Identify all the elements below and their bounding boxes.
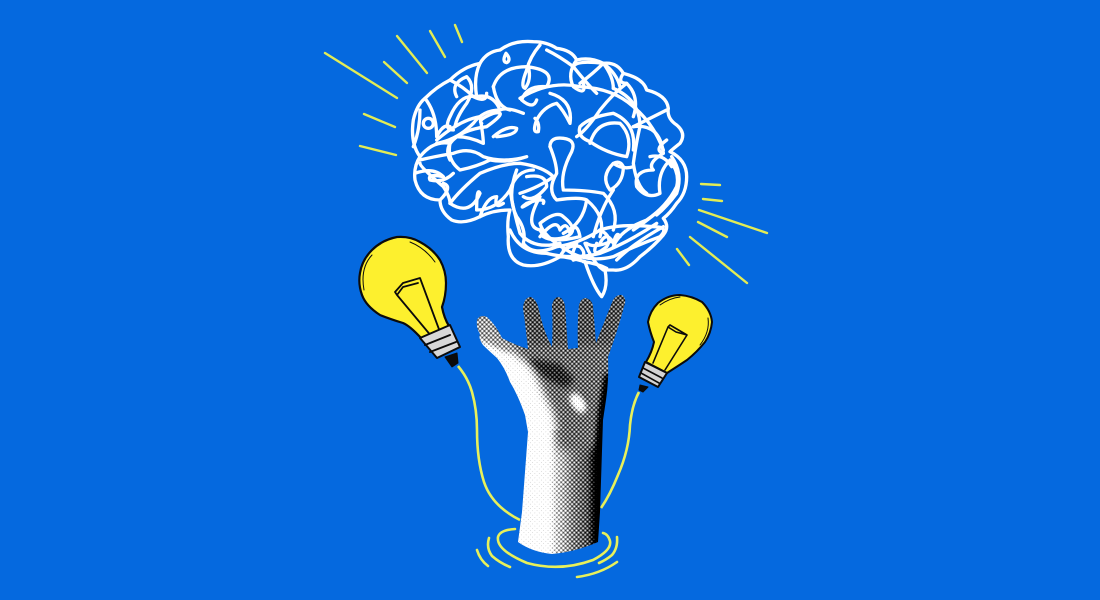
bulb screw collar — [639, 362, 667, 387]
forearm shading — [548, 430, 601, 554]
thumb shading — [478, 316, 519, 356]
light rays: upper left of brain — [325, 25, 462, 155]
wrist dark shadow — [596, 375, 615, 545]
collar thread lines — [425, 335, 456, 352]
right light bulb — [639, 295, 712, 392]
bulb tip — [639, 385, 648, 392]
light rays: lower right of brain — [677, 184, 767, 283]
left light bulb — [359, 237, 460, 367]
dot screen — [476, 294, 626, 554]
bulb glass — [646, 295, 712, 373]
filament — [653, 325, 687, 370]
bulb highlights — [363, 242, 435, 290]
wire: right bulb to hand — [601, 392, 639, 508]
water ripples — [477, 529, 617, 577]
palm and finger shading — [476, 296, 626, 456]
bulb highlight — [660, 297, 708, 345]
bulb tip — [445, 353, 458, 367]
bulb glass — [359, 237, 449, 338]
wire: left bulb to hand — [458, 366, 520, 520]
halftone hand — [476, 294, 626, 554]
bulb screw collar — [420, 325, 460, 358]
finger base shading — [523, 295, 626, 346]
collar thread lines — [641, 368, 662, 383]
palm dark crease — [527, 358, 575, 388]
filament — [395, 278, 440, 337]
brain scribble — [412, 41, 687, 297]
palm highlight — [568, 392, 588, 414]
